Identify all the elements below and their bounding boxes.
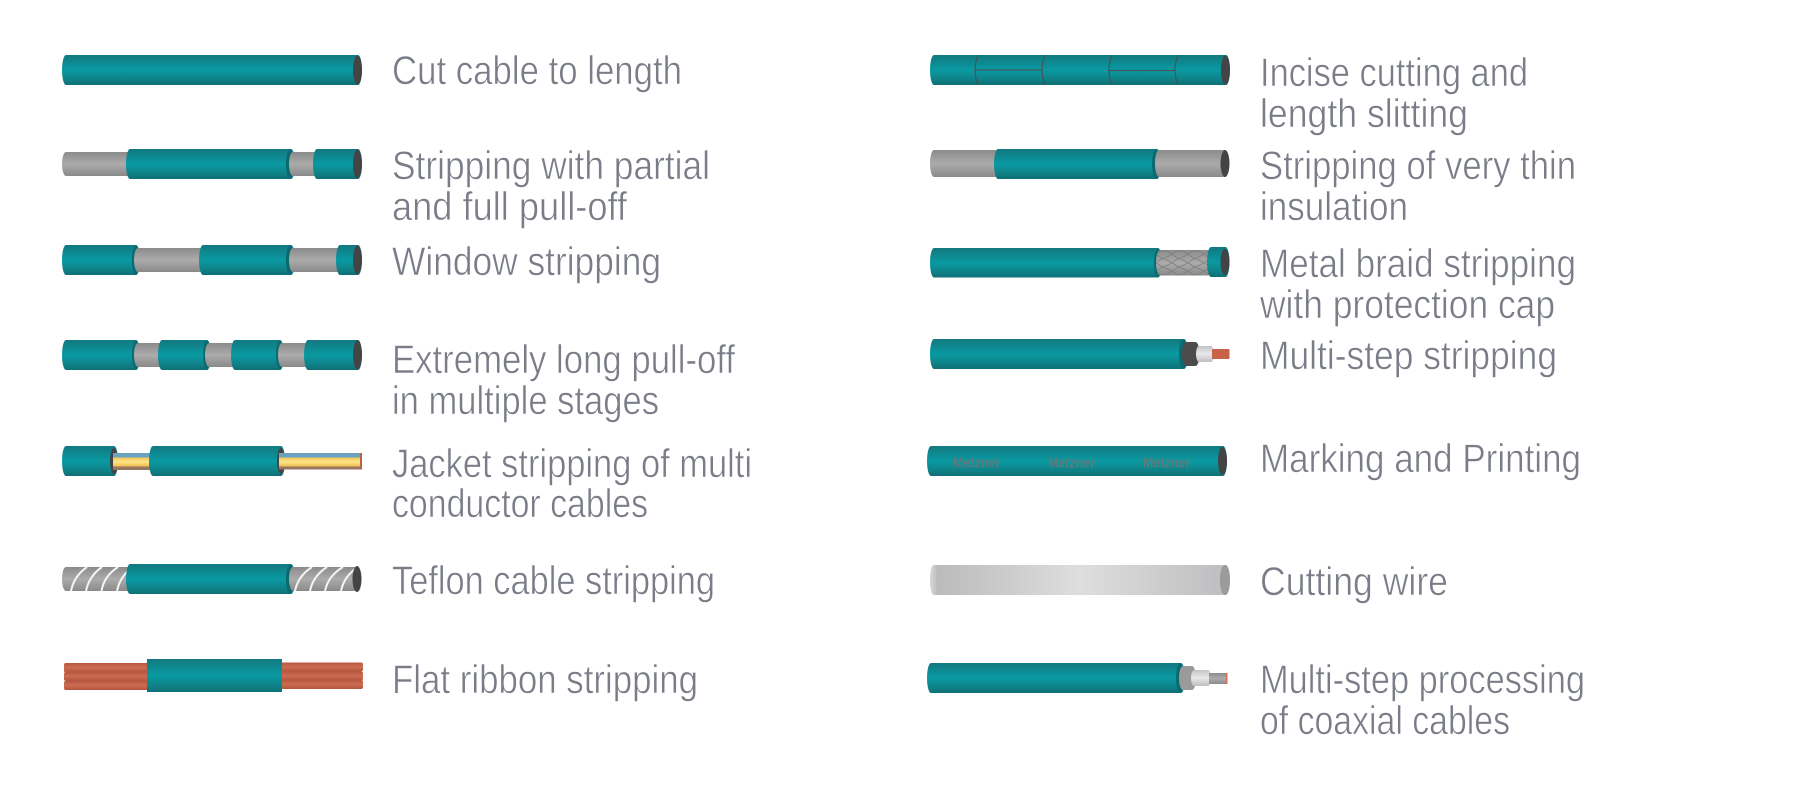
- row: flat ribbon stripping: [64, 658, 698, 702]
- label: Stripping of very thin: [1260, 144, 1576, 188]
- label: of coaxial cables: [1260, 699, 1510, 743]
- label: conductor cables: [392, 482, 648, 526]
- label: [1260, 51, 1528, 136]
- label: in multiple stages: [392, 379, 659, 423]
- label: Multi-step stripping: [1260, 334, 1557, 378]
- label: Flat ribbon stripping: [392, 658, 698, 702]
- row: stripping of very thin insulation: [930, 144, 1576, 229]
- icon: jacket stripped multi conductor cable: [62, 446, 362, 476]
- icon: printed cable: Metzner: [1143, 454, 1190, 472]
- label: [1260, 658, 1585, 743]
- label: [1259, 242, 1576, 327]
- row: teflon cable stripping: [62, 564, 712, 602]
- row: jacket stripping of multi conductor cables: [62, 442, 752, 526]
- row: marking and printing: [927, 437, 1581, 481]
- label: and full pull-off: [392, 185, 628, 229]
- label: Stripping with partial: [392, 144, 710, 188]
- icon: silver wire: [930, 565, 1230, 595]
- row: metal braid stripping with protection cap: [930, 242, 1576, 327]
- row: multi-step processing of coaxial cables: [927, 658, 1585, 743]
- label: [392, 442, 752, 526]
- row: multi-step stripping: [930, 334, 1557, 378]
- icon: partially stripped cable: [62, 149, 362, 179]
- row: cutting wire: [930, 560, 1448, 604]
- icon: flat ribbon cable: [64, 659, 363, 692]
- infographic: cable processing applications: [62, 54, 1582, 734]
- icon: window stripped cable: [62, 245, 362, 275]
- row: stripping with partial and full pull-off: [62, 144, 710, 229]
- label: Jacket stripping of multi: [392, 442, 752, 486]
- row: cut cable to length: [62, 49, 682, 93]
- label: length slitting: [1260, 92, 1468, 136]
- icon: printed cable: Metzner: [953, 454, 1000, 472]
- icon: thin insulation cable: [930, 149, 1230, 179]
- icon: multi stage stripped cable: [62, 340, 362, 370]
- row: window stripping: [62, 240, 661, 284]
- label: Cutting wire: [1260, 560, 1448, 604]
- icon: incised cable: [930, 55, 1230, 85]
- icon: metal braid cable with cap: [930, 247, 1230, 278]
- icon: full teal cable: [62, 55, 362, 85]
- label: Multi-step processing: [1260, 658, 1585, 702]
- icon: coaxial cable: [927, 663, 1228, 693]
- icon: printed cable: Metzner: [1048, 454, 1095, 472]
- icon: multi-step stripped cable: [930, 339, 1230, 369]
- label: Teflon cable stripping: [392, 559, 715, 603]
- label: insulation: [1260, 185, 1408, 229]
- icon: teflon cable with spiral stripes: [62, 564, 362, 594]
- label: Marking and Printing: [1260, 437, 1581, 481]
- label: [392, 338, 736, 423]
- icon: printed cable: [927, 446, 1227, 476]
- row: extremely long pull-off: [62, 338, 736, 423]
- label: [1260, 144, 1576, 229]
- label: Metal braid stripping: [1260, 242, 1576, 286]
- row: incise cutting and length slitting: [930, 51, 1528, 136]
- label: Window stripping: [392, 240, 661, 284]
- label: Incise cutting and: [1260, 51, 1528, 95]
- label: Cut cable to length: [392, 49, 682, 93]
- label: [392, 144, 710, 229]
- label: Extremely long pull-off: [392, 338, 736, 382]
- label: with protection cap: [1259, 283, 1555, 327]
